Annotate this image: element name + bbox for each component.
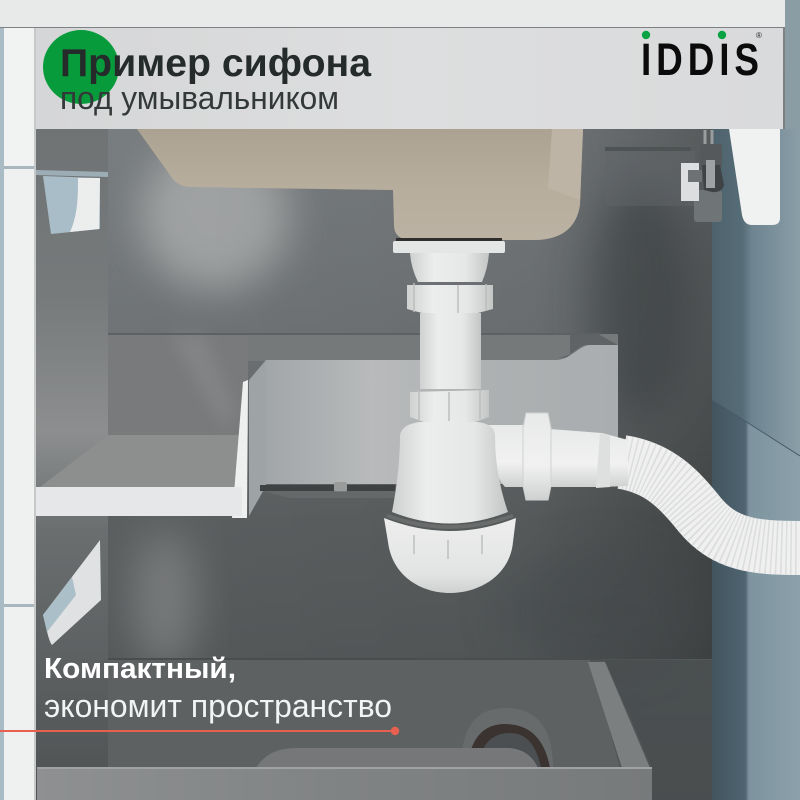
green accent circle <box>43 30 119 104</box>
right corner wall strip <box>785 0 800 129</box>
siphon body <box>392 422 508 524</box>
upper nut <box>407 283 493 313</box>
drain flange <box>393 238 505 253</box>
outlet pipe <box>488 425 628 488</box>
drain neck <box>410 253 489 282</box>
cabinet lighting on back wall <box>108 129 712 670</box>
drawer panel <box>232 345 618 518</box>
stone filling <box>256 748 538 768</box>
callout heading: Компактный, <box>44 653 236 685</box>
bottom box inner back wall <box>108 658 712 800</box>
white shelf front edge <box>36 487 242 516</box>
shelf ledge behind the drawer <box>108 333 618 361</box>
panel: inner shelf compartment <box>40 333 248 487</box>
flexible corrugated hose <box>622 462 800 548</box>
lower nut <box>410 390 489 422</box>
panel: left cabinet side wall <box>34 129 108 800</box>
bottom box front panel <box>37 767 652 800</box>
panel: header front plate <box>36 28 783 129</box>
drawer runner <box>260 482 395 498</box>
cabinet post: left white edge <box>0 28 36 800</box>
vertical tube <box>420 313 481 389</box>
callout description: экономит пространство <box>44 688 392 724</box>
right top white bracket <box>729 129 780 225</box>
sink bowl <box>137 129 583 240</box>
logo: IDDIS: IDDIS <box>641 35 764 85</box>
sealing ring <box>386 514 514 529</box>
outlet pipe nut <box>523 413 551 500</box>
icon: chrome tap valve <box>681 130 724 201</box>
title: Пример сифона <box>60 42 371 85</box>
panel: right cabinet wall <box>712 129 800 800</box>
upper hinge bracket <box>36 170 108 234</box>
panel: siphon assembly <box>384 238 800 593</box>
lower hinge bracket <box>43 540 101 645</box>
drain pipe in box <box>461 708 553 768</box>
callout: compact <box>0 653 399 735</box>
subtitle: под умывальником <box>60 80 339 116</box>
bottle cup <box>384 518 516 593</box>
callout pointer line <box>0 727 399 735</box>
countertop band <box>0 0 785 27</box>
logo: IDDIS: ® <box>756 31 762 40</box>
shadow on wall behind tap <box>605 147 722 222</box>
